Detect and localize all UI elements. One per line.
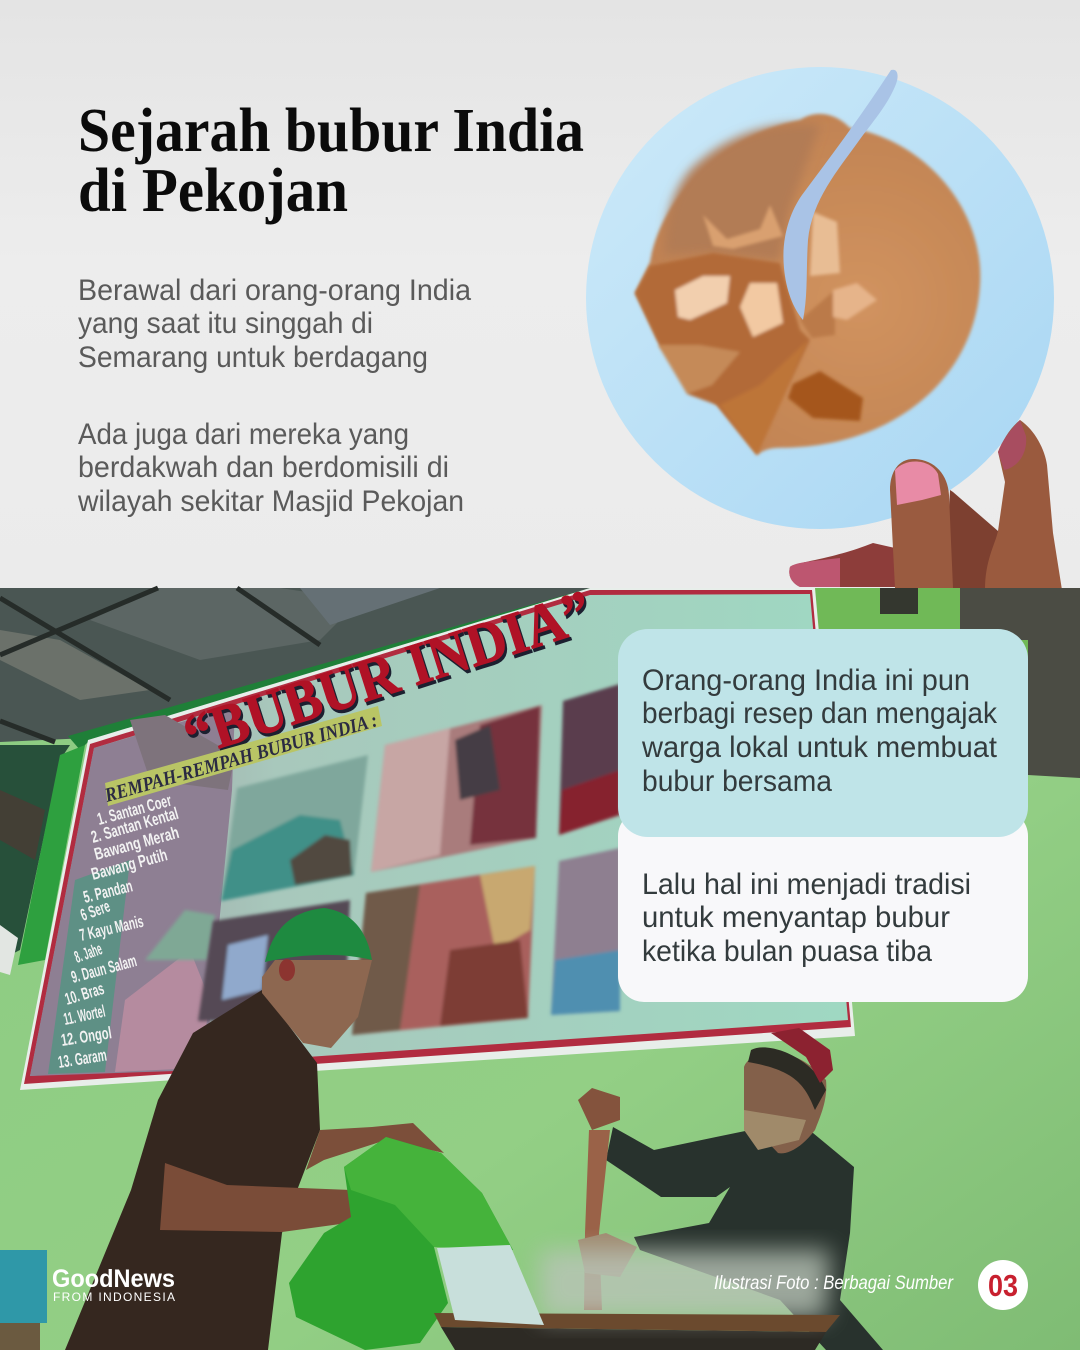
panel: paper top background: [0, 0, 1080, 588]
spice list: 5. Pandan: [81, 876, 134, 907]
photo: man stirring pot: [578, 1028, 883, 1350]
photo: Bubur India banner: [20, 578, 855, 1090]
callout: recipe sharing: berbagi resep dan mengajak: [642, 697, 998, 730]
face mask: [744, 1110, 806, 1150]
callout: recipe sharing: Lalu hal ini menjadi tradisi: [642, 868, 971, 901]
spice list: 11. Wortel: [62, 1002, 107, 1029]
photo: blue bucket: [0, 1250, 47, 1350]
roof beams: [0, 588, 320, 742]
ear: [279, 959, 295, 981]
photo: milk bag: [437, 1245, 544, 1325]
spice list: 9. Daun Salam: [69, 951, 139, 987]
page number badge: [978, 1260, 1028, 1310]
spice list: 6 Sere: [78, 897, 113, 925]
photo: cooking pot with steam: [434, 1250, 840, 1350]
photo: man pouring from green basin: [65, 908, 444, 1350]
callout: recipe sharing: bubur bersama: [642, 765, 832, 798]
logo: GoodNews from Indonesia: [52, 1265, 175, 1304]
text block: preaching: Ada juga dari mereka yang: [78, 418, 409, 451]
plate: [586, 67, 1054, 529]
spice list: 1. Santan Coer: [95, 791, 174, 829]
paddle: [584, 1130, 610, 1310]
spice list: 2. Santan Kental: [89, 804, 181, 847]
mosque backdrop: [30, 706, 235, 1076]
callout: recipe sharing: ketika bulan puasa tiba: [642, 935, 932, 968]
photo: green wall background: [0, 588, 1080, 1350]
text block: preaching: [77, 418, 464, 518]
banner heading: “BUBUR INDIA”: [178, 581, 602, 772]
banner photos: [198, 684, 620, 1035]
callout: recipe sharing: [618, 629, 1028, 1002]
near arm: [160, 1163, 427, 1268]
banner subheading stripe: REMPAH-REMPAH BUBUR INDIA :: [102, 709, 380, 807]
spice list: Bawang Putih: [89, 845, 169, 884]
lower hand: [578, 1233, 637, 1277]
illustration: bowl of bubur held by hand: [586, 67, 1062, 590]
head: [744, 1052, 826, 1153]
page number badge: 03: [988, 1268, 1018, 1303]
text block: preaching: berdakwah dan berdomisili di: [78, 451, 449, 484]
head: [262, 960, 372, 1048]
soup darker upper left: [665, 124, 820, 262]
callout: recipe sharing: Orang-orang India ini pun: [642, 664, 970, 697]
bubur toppings: [635, 205, 877, 455]
hand: [789, 420, 1062, 590]
spice list: 12. Ongol: [60, 1023, 113, 1050]
green cap: [265, 908, 372, 962]
spice list: 7 Kayu Manis: [78, 912, 145, 945]
text block: origin: Semarang untuk berdagang: [78, 341, 428, 374]
callout: recipe sharing: untuk menyantap bubur: [642, 901, 950, 934]
photo: corrugated roof: [0, 588, 590, 742]
title: di Pekojan: [78, 157, 348, 225]
red cap: [771, 1028, 833, 1083]
spice list: Bawang Merah: [92, 823, 181, 864]
callout: recipe sharing: warga lokal untuk membuat: [641, 731, 998, 764]
spice list: 8. Jahe: [72, 939, 105, 967]
shirt: [65, 990, 320, 1350]
top hand: [578, 1088, 620, 1130]
far arm: [306, 1123, 444, 1170]
text block: origin: [78, 274, 471, 374]
spice list: 13. Garam: [57, 1046, 108, 1072]
body: [606, 1127, 883, 1350]
spice list: [57, 791, 181, 1072]
soup: [635, 114, 980, 455]
logo: GoodNews from Indonesia: FROM INDONESIA: [53, 1290, 175, 1304]
photo credit: Ilustrasi Foto : Berbagai Sumber: [714, 1273, 954, 1294]
photo: upper wall and pillar: [0, 588, 1080, 975]
title: Sejarah bubur India: [78, 97, 584, 165]
photo: green basin: [289, 1137, 513, 1350]
spoon: [783, 70, 898, 320]
logo: GoodNews from Indonesia: GoodNews: [52, 1265, 175, 1293]
text block: preaching: wilayah sekitar Masjid Pekojan: [77, 485, 464, 518]
banner heading: “BUBUR INDIA”: [176, 578, 600, 769]
text block: origin: Berawal dari orang-orang India: [78, 274, 471, 307]
title: [78, 97, 584, 225]
text block: origin: yang saat itu singgah di: [78, 307, 373, 340]
hair: [748, 1047, 826, 1110]
spice list: 10. Bras: [63, 979, 106, 1009]
